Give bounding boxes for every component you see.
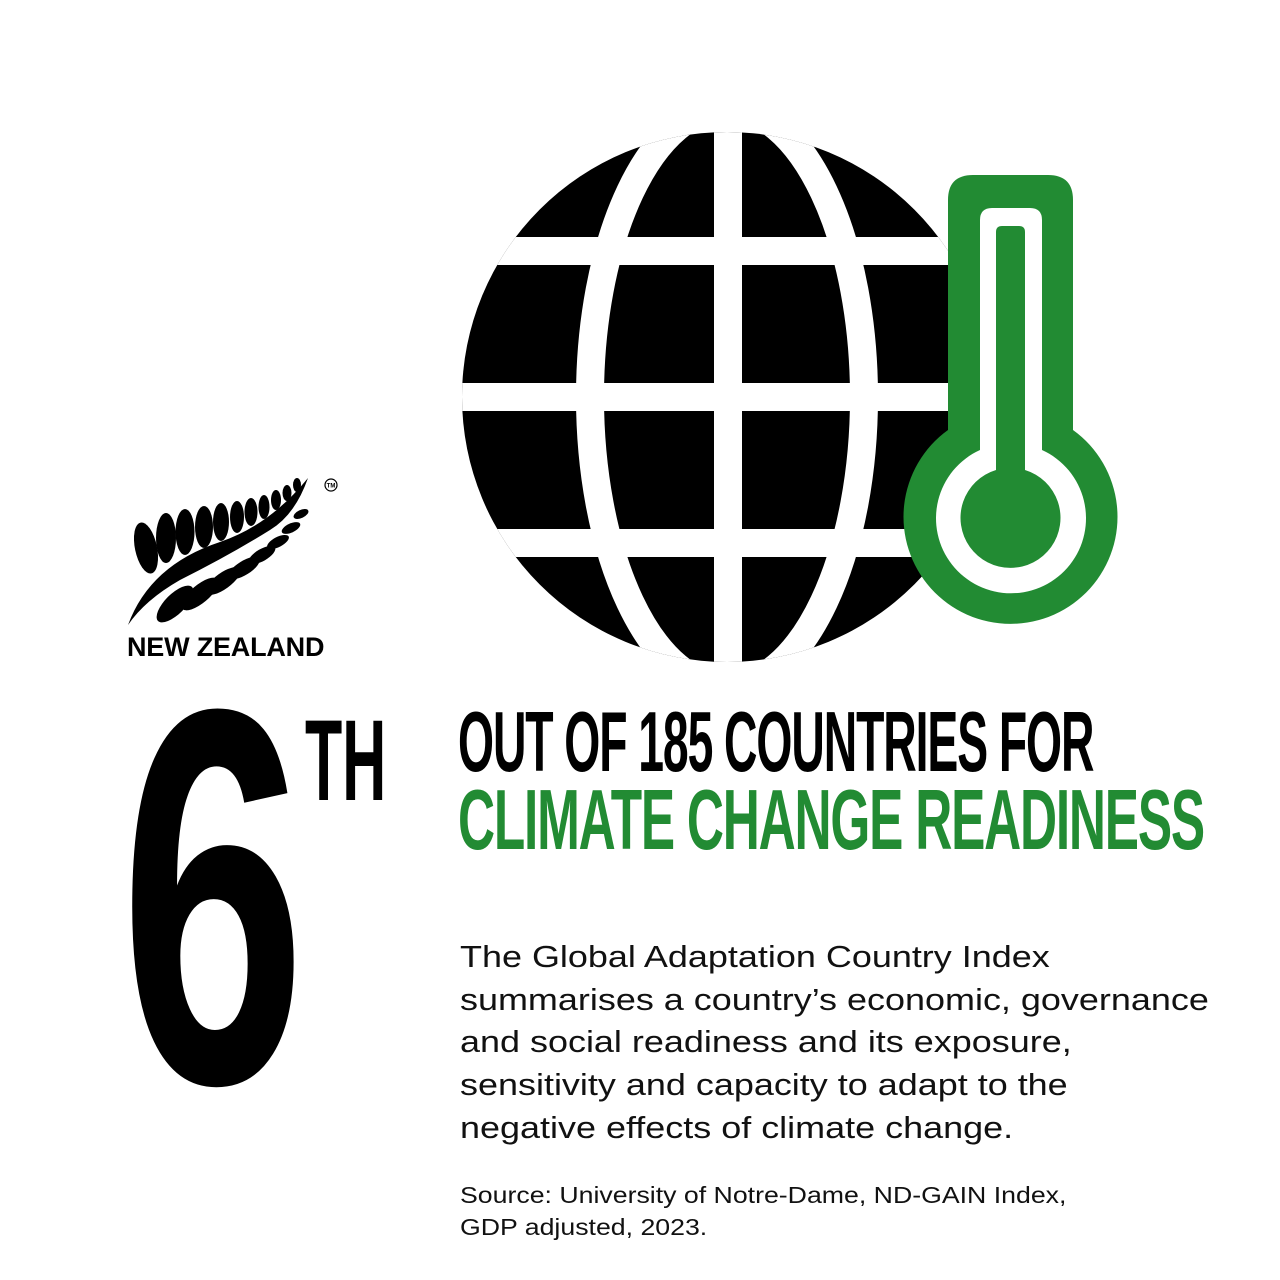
body text: and social readiness and its exposure,	[460, 1024, 1072, 1059]
big number 6: 6	[120, 599, 306, 1196]
headline: OUT OF 185 COUNTRIES FOR	[458, 695, 1093, 790]
source note	[460, 1182, 1066, 1240]
icon: globe	[462, 132, 948, 662]
body text: summarises a country’s economic, governance	[460, 982, 1209, 1017]
trademark	[325, 479, 337, 491]
body text	[460, 939, 1209, 1145]
icon: fern	[128, 478, 310, 628]
headline: CLIMATE CHANGE READINESS	[458, 773, 1204, 868]
body text: negative effects of climate change.	[460, 1110, 1013, 1145]
icon: globe with thermometer	[462, 132, 1118, 662]
headline	[458, 695, 1204, 868]
logo: silver fern New Zealand	[127, 478, 338, 662]
source note: Source: University of Notre-Dame, ND-GAIN Index,	[460, 1182, 1066, 1208]
trademark: TM	[327, 484, 335, 490]
text: NEW ZEALAND: NEW ZEALAND	[127, 632, 324, 662]
body text: The Global Adaptation Country Index	[460, 939, 1050, 974]
icon: thermometer	[903, 175, 1118, 624]
rank: 6th	[120, 599, 386, 1196]
source note: GDP adjusted, 2023.	[460, 1214, 707, 1240]
body text: sensitivity and capacity to adapt to the	[460, 1067, 1068, 1102]
superscript TH: TH	[305, 697, 386, 825]
